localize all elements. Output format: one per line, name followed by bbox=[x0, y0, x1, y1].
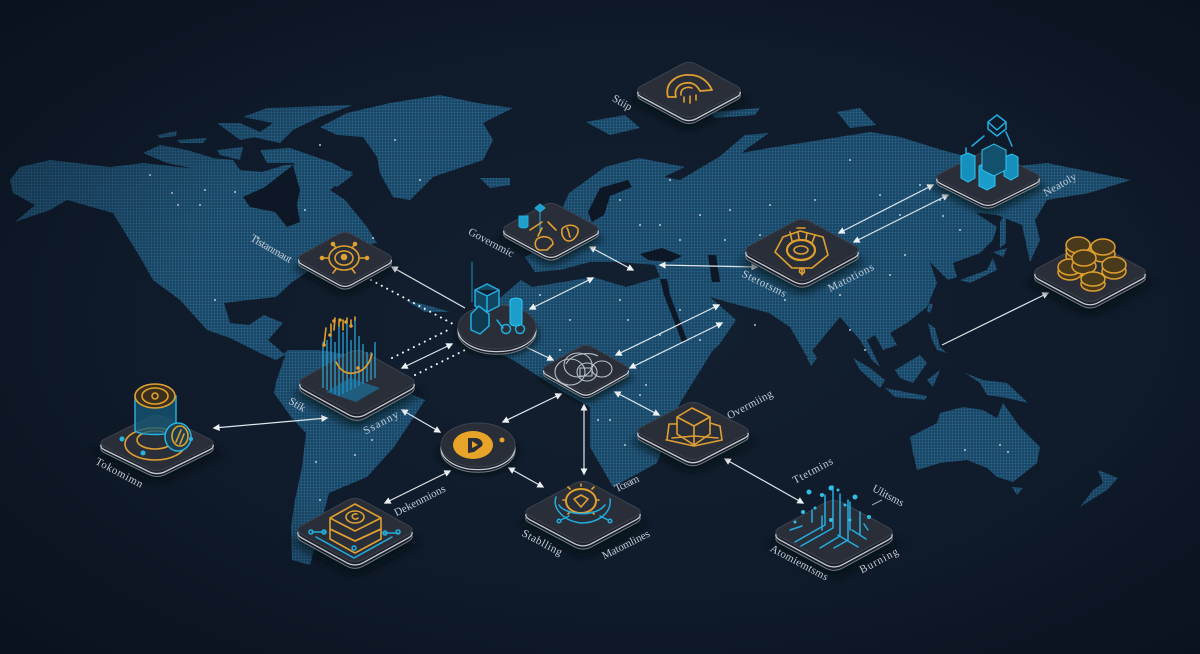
islands: Japan, Southeast Asia, Sri Lanka bbox=[807, 213, 1028, 403]
icon: target bbox=[320, 242, 368, 273]
map labels: Matotions bbox=[826, 261, 876, 295]
map labels: Neatoly bbox=[1041, 171, 1079, 199]
icon: cyan cylinder bbox=[519, 216, 528, 228]
icon: plate nodes bbox=[120, 436, 193, 456]
icon: glass cylinder bbox=[135, 396, 176, 434]
city lights bbox=[150, 140, 1008, 500]
continent: Greenland bbox=[320, 95, 513, 200]
card: central disc with blocks bbox=[456, 262, 538, 357]
icon: circuit traces bbox=[790, 486, 868, 548]
continent: North America bbox=[10, 160, 377, 360]
card: stablecoin hexagon bbox=[742, 219, 862, 294]
card: south america chart bbox=[296, 317, 418, 428]
card: top signal bbox=[635, 62, 743, 130]
Hudson Bay bbox=[243, 165, 300, 227]
icon: chart nodes bbox=[322, 318, 360, 370]
icon: signal arcs bbox=[667, 75, 712, 103]
map labels: Stiip bbox=[610, 93, 634, 114]
map labels: Stik bbox=[286, 395, 308, 415]
map labels: Ssanny bbox=[361, 409, 401, 437]
continent: South America bbox=[274, 350, 425, 565]
Canadian arctic islands bbox=[143, 105, 353, 187]
northern islands bbox=[405, 108, 1075, 312]
card: overlapping circles bbox=[541, 345, 631, 403]
icon: small rings bbox=[497, 320, 524, 334]
map labels: Burning bbox=[858, 546, 901, 576]
icon: coin bbox=[165, 423, 191, 451]
card: governance europe bbox=[501, 203, 601, 266]
map labels: Stablling bbox=[520, 527, 565, 559]
icon: overlapping circles bbox=[555, 353, 612, 385]
icon: cyan cylinder bbox=[510, 298, 522, 326]
icon: cyan cradle bbox=[555, 497, 612, 523]
map labels: Governmic bbox=[466, 226, 516, 260]
map labels: Ulitsms bbox=[870, 483, 906, 509]
icon: cylinder lid bbox=[135, 384, 175, 408]
icon: glowing bars bbox=[323, 317, 380, 402]
card: blockchain cubes bbox=[934, 115, 1042, 214]
map labels: Atomiemtsms bbox=[768, 543, 830, 583]
continent: Eurasia and Africa bbox=[470, 132, 1131, 487]
icon: sun badge bbox=[563, 484, 599, 514]
icon: gold coin bbox=[453, 431, 493, 459]
icon: plate rings bbox=[125, 428, 185, 460]
tick near utility label bbox=[872, 500, 882, 505]
map labels: Overmiing bbox=[725, 388, 775, 422]
icon: cube bbox=[666, 408, 722, 446]
map labels: Stetotsms bbox=[740, 268, 788, 300]
map labels: Tokomimn bbox=[93, 455, 145, 491]
map labels bbox=[93, 93, 1079, 583]
icon: hexagon vault bbox=[775, 228, 828, 275]
map labels: Matomlines bbox=[600, 528, 652, 562]
card: circuit bbox=[772, 486, 896, 578]
icon: stacked layers bbox=[330, 504, 381, 553]
icon: cyan marker bbox=[535, 204, 545, 232]
card: cube bbox=[634, 402, 752, 472]
icon: coins bbox=[1058, 237, 1126, 291]
connection arrows bbox=[214, 185, 1048, 503]
card: stable sun bbox=[522, 481, 644, 556]
icon: cyan tower bbox=[471, 262, 499, 334]
islands: New Zealand, Tasmania bbox=[1012, 470, 1118, 507]
icon: circuit nodes bbox=[794, 486, 871, 524]
card: south america stack bbox=[294, 498, 416, 576]
icon: cyan columns bbox=[961, 115, 1018, 190]
card: coin stacks bbox=[1031, 237, 1149, 315]
card: north america target bbox=[296, 232, 394, 295]
icon: circuit lines bbox=[309, 530, 400, 558]
card: left cylinder bbox=[97, 384, 217, 483]
icon: coin dot bbox=[500, 438, 504, 442]
map labels: Ttetmins bbox=[791, 455, 835, 487]
icon: play mark bbox=[468, 438, 483, 453]
card: middle coin disc bbox=[439, 423, 517, 475]
map labels: Tceam bbox=[613, 473, 642, 495]
icon: governance glyphs bbox=[530, 222, 578, 250]
continent: Australia bbox=[910, 403, 1040, 482]
map labels: Tistanmaut bbox=[248, 232, 294, 266]
seas cut out of Eurasia bbox=[588, 180, 720, 342]
map labels: Dekenmions bbox=[392, 483, 448, 519]
